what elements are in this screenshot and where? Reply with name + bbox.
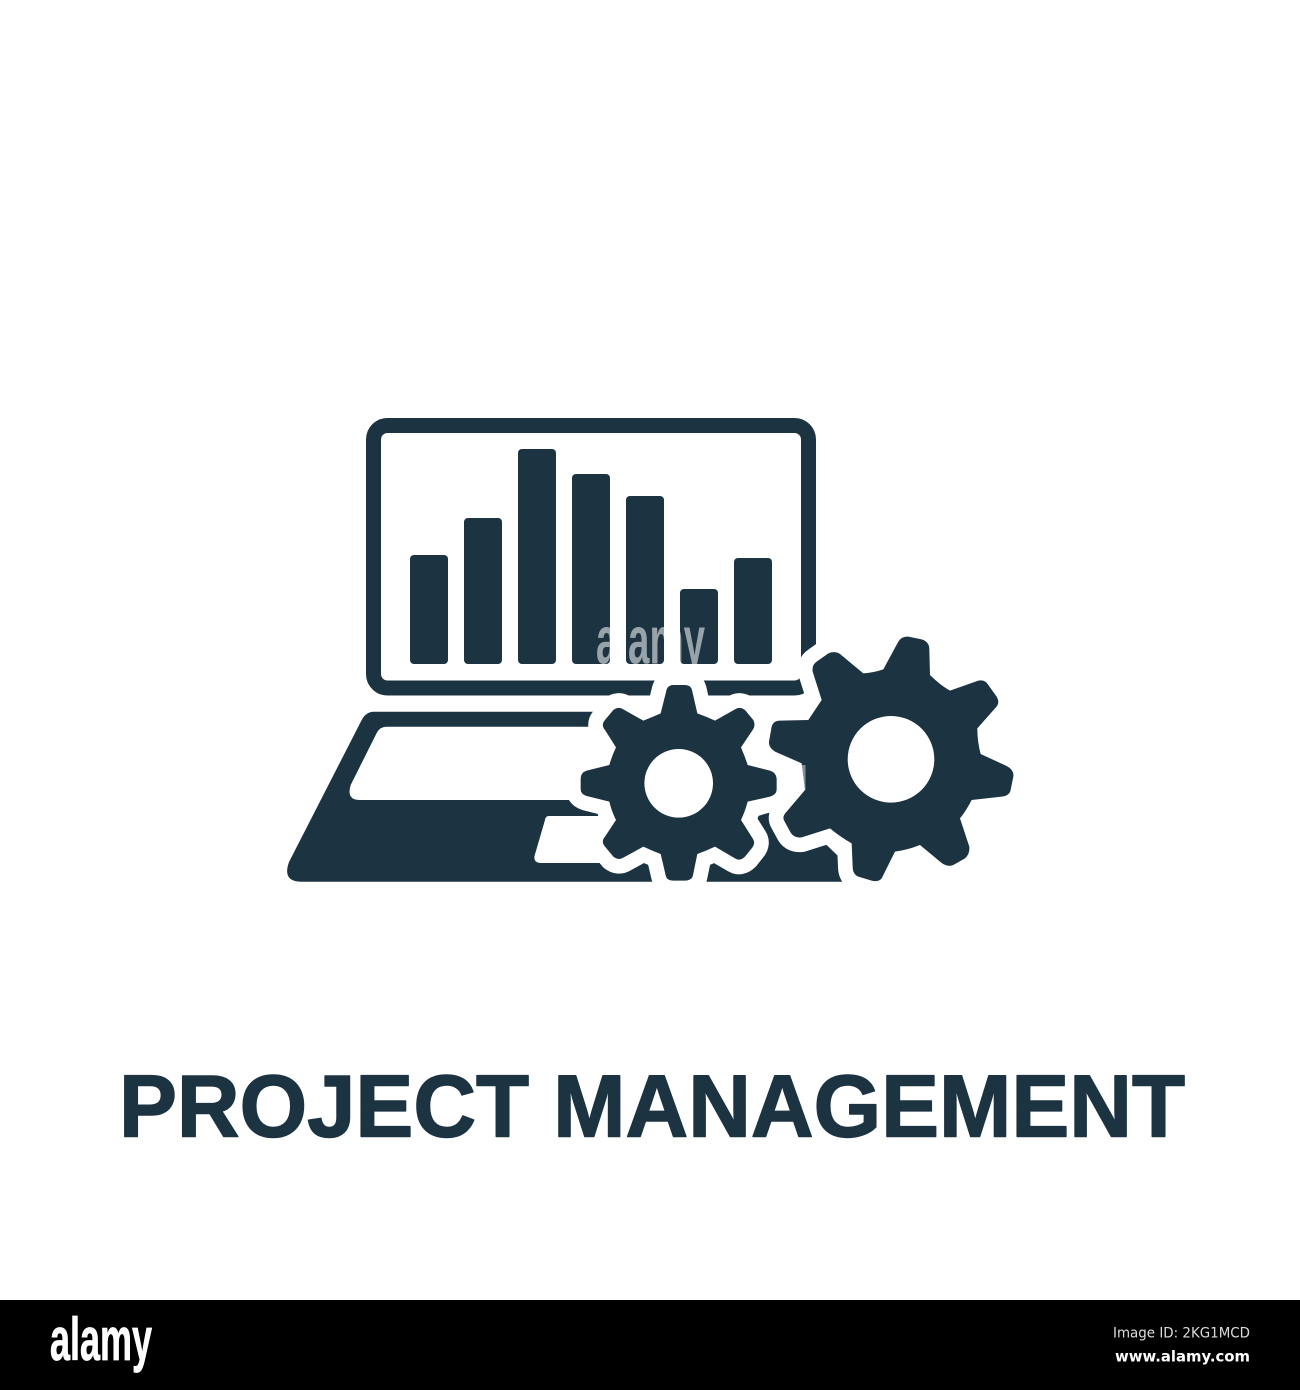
small gear xyxy=(581,685,777,881)
gear halos xyxy=(581,637,1013,881)
website: www.alamy.com xyxy=(1115,1348,1250,1366)
bar chart xyxy=(410,449,772,664)
laptop keyboard base xyxy=(287,712,865,882)
image id: Image ID: 2KG1MCD xyxy=(1113,1326,1250,1342)
icon: laptop with bar chart and gears xyxy=(287,426,1013,882)
title: PROJECT MANAGEMENT xyxy=(119,1056,1185,1156)
laptop screen frame xyxy=(374,426,808,688)
footer logo: alamy xyxy=(50,1306,152,1373)
footer bar xyxy=(0,1300,1300,1390)
watermark over bars: alamy xyxy=(596,602,705,678)
large gear xyxy=(769,637,1013,881)
